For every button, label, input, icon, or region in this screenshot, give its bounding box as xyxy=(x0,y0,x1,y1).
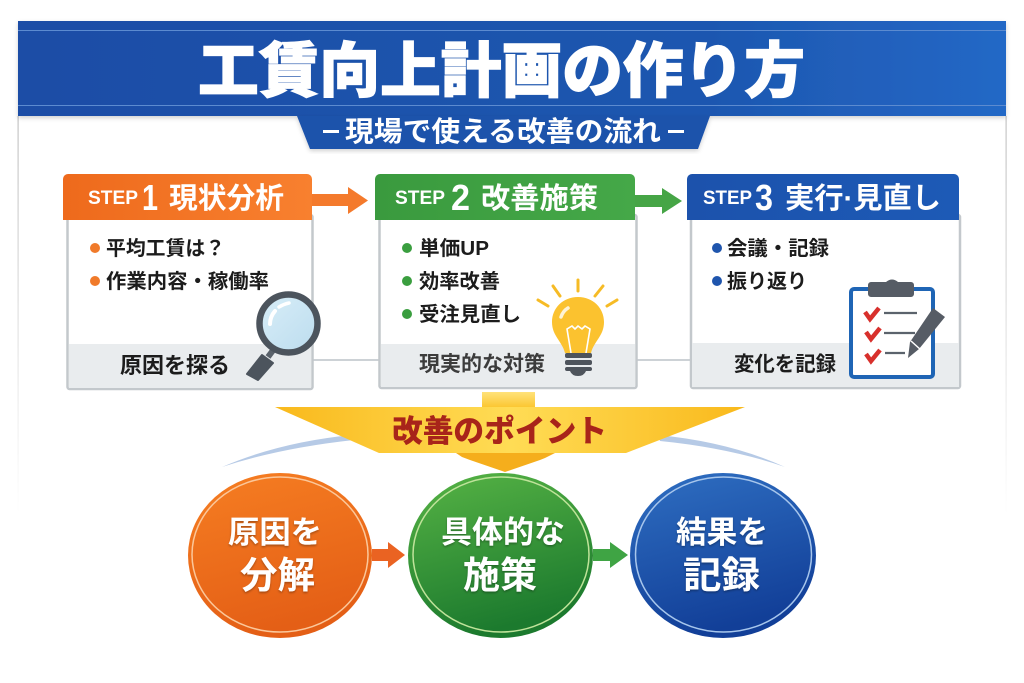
step 3 footer text: 変化を記録 xyxy=(734,353,836,376)
step 3 bullets xyxy=(712,237,829,293)
panel: step 2 xyxy=(375,174,636,388)
step 2 header: 2 xyxy=(451,177,470,218)
step 1 bullets: 平均工賃は？ xyxy=(106,237,225,260)
subtitle ribbon xyxy=(297,116,710,149)
page frame xyxy=(18,116,1007,516)
step 3 footer band xyxy=(692,343,959,387)
connector lines between cards xyxy=(313,359,690,361)
circle: 結果を記録 xyxy=(630,473,816,638)
arrow: step 1 to step 2 xyxy=(312,187,368,214)
title: 工賃向上計画の作り方 xyxy=(198,38,805,105)
icon: light bulb xyxy=(538,280,617,376)
circle: 原因を分解: 分解 xyxy=(240,555,315,596)
subtitle ribbon: 現場で使える改善の流れ xyxy=(345,116,661,147)
icon: clipboard with pen xyxy=(851,280,945,377)
arrow: orange circle to green circle xyxy=(372,542,405,568)
step 3 header: 3 xyxy=(755,177,773,218)
circle: 具体的な施策: 施策 xyxy=(463,555,537,596)
step 3 header xyxy=(687,174,959,220)
step 1 header: STEP xyxy=(88,188,138,209)
step 1 header xyxy=(63,174,312,220)
circle: 原因を分解 xyxy=(188,473,372,638)
banner: improvement points: 改善のポイント xyxy=(392,414,607,449)
step 1 footer text: 原因を探る xyxy=(120,353,230,378)
step 2 bullets xyxy=(402,237,521,326)
step 2 header xyxy=(375,174,635,220)
step 2 footer text: 現実的な対策 xyxy=(419,353,545,376)
step 1 header: 1 xyxy=(142,177,158,218)
circle: 結果を記録: 結果を xyxy=(676,515,768,550)
step 3 bullets: 振り返り xyxy=(727,270,807,293)
step 2 bullets: 受注見直し xyxy=(419,303,521,326)
step 2 footer band xyxy=(381,344,635,387)
panel: step 3 xyxy=(687,174,960,388)
banner: improvement points xyxy=(275,407,745,472)
header banner xyxy=(18,21,1006,116)
step 1 header: 現状分析 xyxy=(169,182,284,215)
step 3 bullets: 会議・記録 xyxy=(727,237,829,260)
arcs behind banner xyxy=(222,435,785,467)
yellow connector tab xyxy=(482,392,535,408)
icon: magnifying glass xyxy=(247,294,318,380)
circle: 具体的な施策 xyxy=(408,473,593,638)
arrow: green circle to blue circle xyxy=(593,542,628,568)
step 3 header: STEP xyxy=(703,188,752,209)
step 1 bullets: 作業内容・稼働率 xyxy=(106,270,269,293)
step 1 footer band xyxy=(69,344,311,388)
panel: step 1 xyxy=(63,174,312,389)
circle: 具体的な施策: 具体的な xyxy=(441,515,565,550)
arrow: step 2 to step 3 xyxy=(635,188,682,214)
step 2 bullets: 単価UP xyxy=(419,237,489,260)
circle: 結果を記録: 記録 xyxy=(683,555,760,596)
step 2 header: STEP xyxy=(395,188,445,209)
step 2 header: 改善施策 xyxy=(481,182,598,215)
circle: 原因を分解: 原因を xyxy=(228,515,322,550)
step 3 header: 実行·見直し xyxy=(785,182,941,215)
step 1 bullets xyxy=(90,237,269,293)
step 2 bullets: 効率改善 xyxy=(419,270,500,293)
